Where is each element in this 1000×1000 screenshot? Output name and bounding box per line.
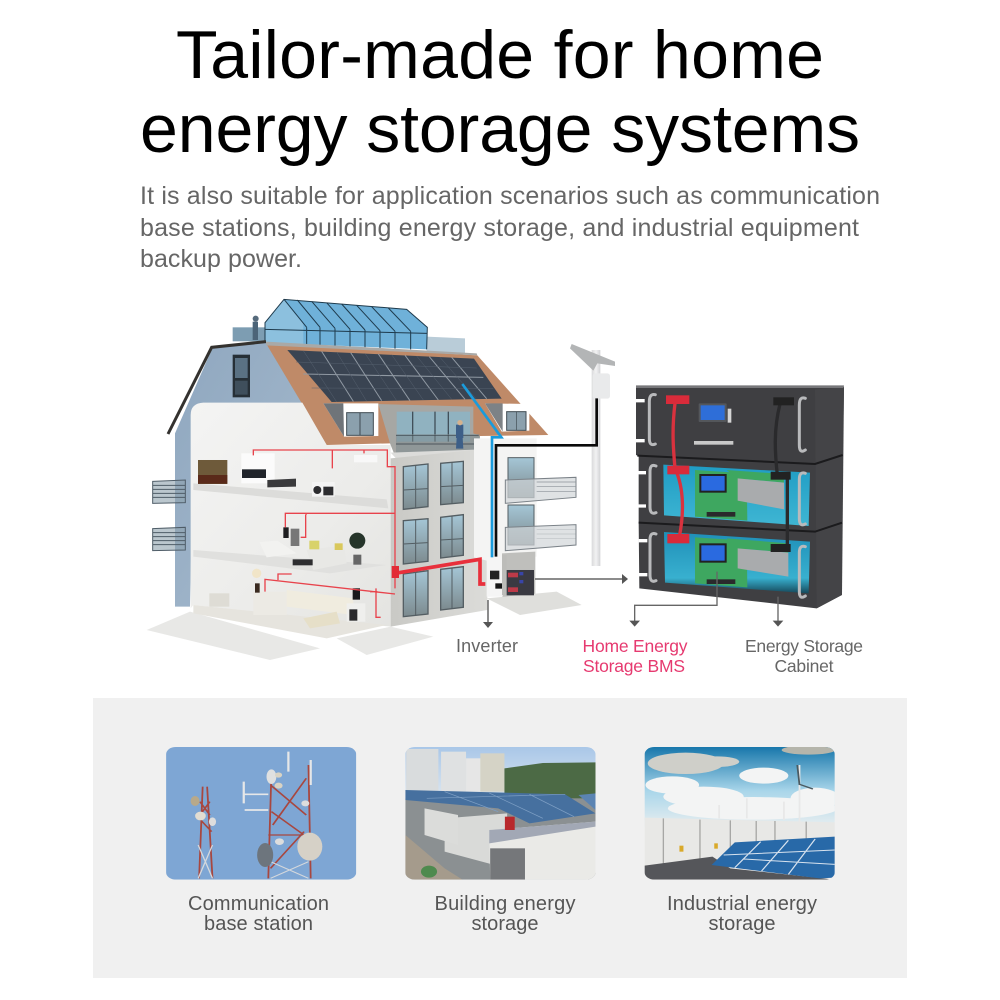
BMS and cabinet arrows bbox=[635, 572, 778, 622]
cabinet with battery modules bbox=[629, 385, 844, 627]
junction box bbox=[392, 566, 399, 578]
caption: industrial energy storage bbox=[667, 893, 817, 935]
kitchen appliances bbox=[241, 453, 275, 483]
photo: industrial storage bbox=[645, 745, 840, 880]
cabinet body bbox=[636, 385, 844, 608]
left balconies bbox=[153, 480, 185, 551]
floor slabs and rooms bbox=[147, 453, 433, 660]
brown roof with solar panels bbox=[266, 342, 548, 445]
title: energy storage systems bbox=[140, 91, 860, 167]
house cutaway illustration bbox=[147, 299, 597, 660]
caption: communication base station: base station bbox=[204, 913, 313, 935]
connection arrow: battery rack to cabinet bbox=[535, 574, 628, 584]
photo: solar on buildings bbox=[405, 747, 596, 880]
label: energy storage cabinet bbox=[745, 636, 863, 676]
top panel display bbox=[694, 403, 733, 445]
label: energy storage cabinet: Cabinet bbox=[774, 656, 834, 676]
utility pole bbox=[570, 344, 615, 566]
ground floor furniture bbox=[253, 592, 287, 615]
living room furniture bbox=[283, 527, 289, 538]
white cutaway wall bbox=[191, 403, 391, 627]
TV with food image bbox=[198, 460, 227, 484]
red wiring bbox=[253, 450, 395, 617]
label: home energy storage BMS: Storage BMS bbox=[583, 656, 685, 676]
handles bbox=[649, 394, 805, 597]
inverter unit bbox=[487, 555, 507, 597]
black grid cable bbox=[496, 398, 597, 557]
greenhouse on roof bbox=[233, 299, 465, 353]
label: energy storage cabinet: Energy Storage bbox=[745, 636, 863, 656]
dormers and upper balcony bbox=[323, 403, 529, 458]
photo: communication towers bbox=[166, 747, 356, 880]
caption: communication base station bbox=[188, 893, 329, 935]
arrow to inverter label bbox=[483, 600, 493, 628]
title bbox=[140, 17, 860, 167]
subtitle text block: base stations, building energy storage, and industrial equipment bbox=[140, 214, 859, 242]
caption: building energy storage bbox=[434, 893, 576, 935]
label: home energy storage BMS bbox=[582, 636, 688, 676]
panel: application scenarios bbox=[93, 698, 907, 978]
caption: building energy storage: storage bbox=[472, 913, 538, 935]
small battery rack bbox=[507, 570, 534, 595]
black battery cables bbox=[771, 397, 794, 552]
subtitle text block: backup power. bbox=[140, 245, 302, 273]
blue gable wall bbox=[175, 342, 327, 607]
label: home energy storage BMS: Home Energy bbox=[582, 636, 688, 656]
subtitle text block bbox=[140, 182, 880, 273]
right side section with balconies bbox=[474, 438, 582, 615]
gable window bbox=[233, 355, 250, 397]
caption: building energy storage: Building energy bbox=[434, 893, 576, 915]
caption: industrial energy storage: Industrial energy bbox=[667, 893, 817, 915]
caption: industrial energy storage: storage bbox=[708, 913, 776, 935]
label: inverter: Inverter bbox=[456, 636, 518, 656]
subtitle text block: It is also suitable for application scenarios such as communication bbox=[140, 182, 880, 210]
blue solar cable bbox=[462, 384, 506, 593]
battery module middle bbox=[663, 465, 810, 526]
red battery cables bbox=[666, 395, 689, 543]
battery module bottom bbox=[664, 532, 810, 593]
grey facade with windows bbox=[391, 450, 487, 627]
caption: communication base station: Communication bbox=[188, 893, 329, 915]
title: Tailor-made for home bbox=[176, 17, 824, 93]
